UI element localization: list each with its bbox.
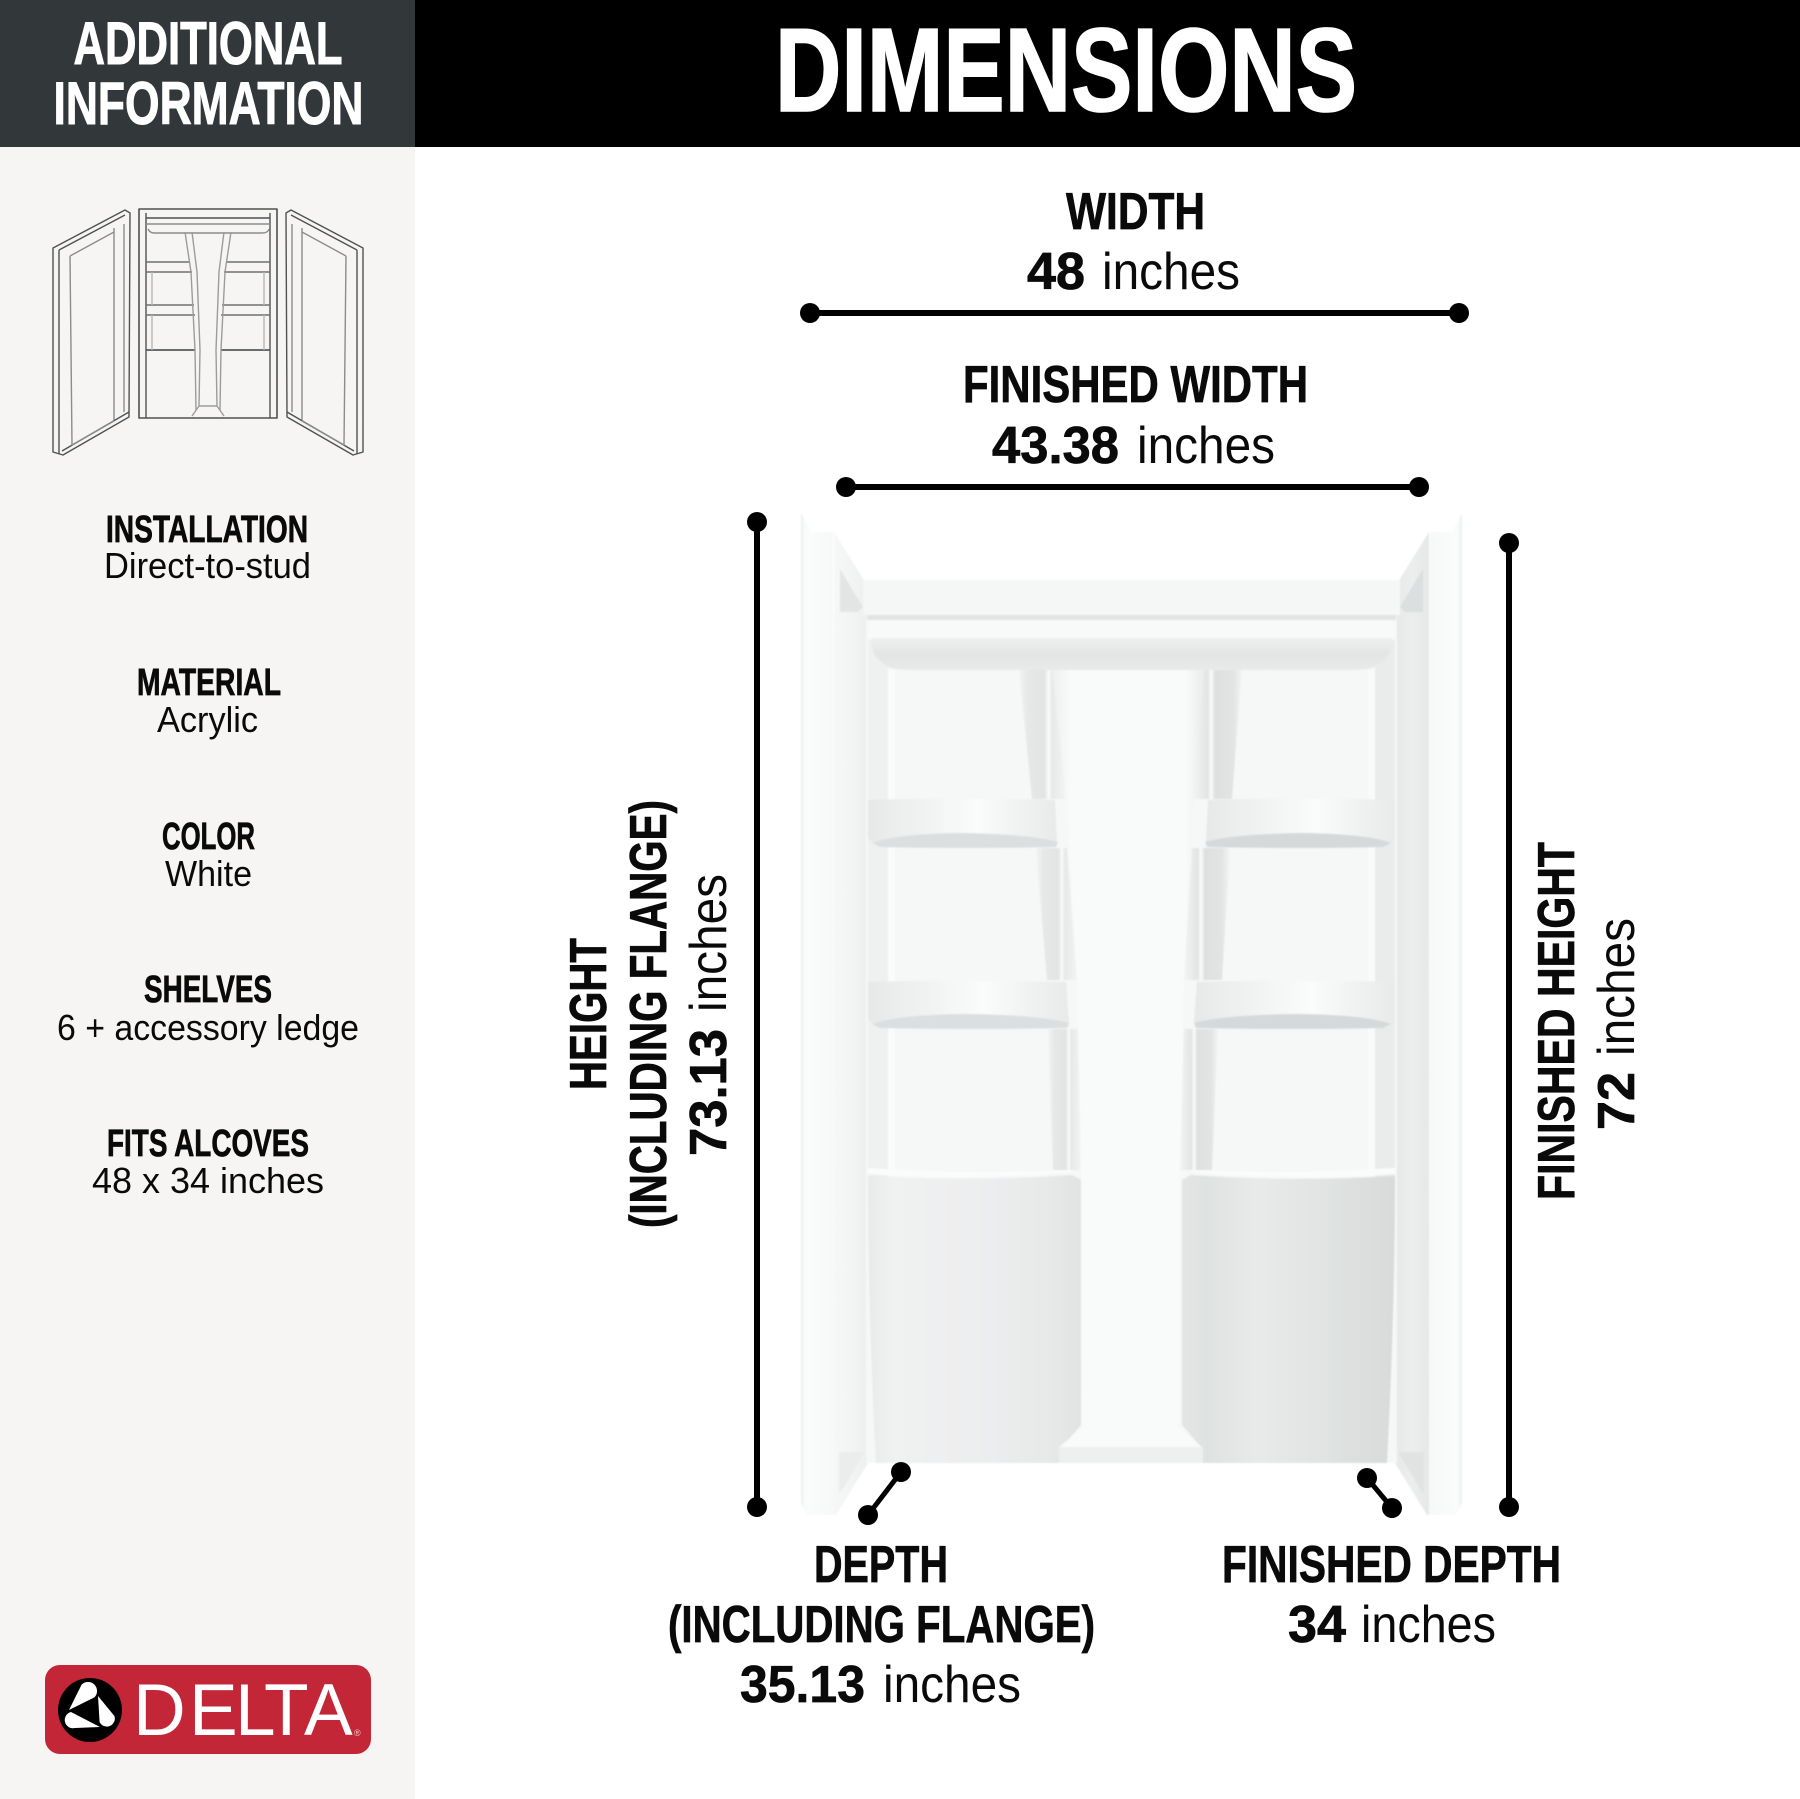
right shelf 1 lip <box>1205 833 1391 848</box>
spec: material <box>137 662 281 740</box>
header: additional information: ADDITIONAL <box>74 10 342 77</box>
left strut 2 <box>1036 848 1077 980</box>
right shelf 2 lip <box>1194 1014 1391 1029</box>
dimension: height label: 73.13 <box>680 1029 738 1156</box>
left side strip <box>868 640 888 1180</box>
right lower bulge <box>1182 1175 1395 1463</box>
logo: delta: ® <box>354 1728 361 1738</box>
dimension: width label: inches <box>1102 243 1240 301</box>
accessory ledge <box>871 638 1392 670</box>
dimension: finished width label: inches <box>1137 417 1275 475</box>
spec: color: White <box>165 853 252 894</box>
spec: color <box>162 816 255 894</box>
panel: additional information sidebar background <box>0 146 415 1799</box>
arrow: depth line <box>858 1462 911 1525</box>
band under shadow <box>868 620 1395 639</box>
spec: fits alcoves <box>92 1123 324 1201</box>
left strut 3 <box>1048 1029 1081 1170</box>
dimension: finished depth label: FINISHED DEPTH <box>1222 1536 1561 1594</box>
right flange <box>1429 513 1462 1515</box>
spec: material: Acrylic <box>157 699 258 740</box>
floor strip <box>1059 1447 1203 1463</box>
left flange <box>801 513 834 1515</box>
left side strip highlight <box>888 670 895 1170</box>
dimension: finished width label: FINISHED WIDTH <box>963 356 1308 414</box>
dimension: height label <box>560 800 738 1228</box>
dimension: finished depth label: 34 <box>1288 1596 1346 1654</box>
dimension: depth label <box>668 1536 1095 1714</box>
logo: delta: DELTA <box>133 1670 353 1751</box>
dimension: depth label: DEPTH <box>814 1536 948 1594</box>
spec: fits alcoves: 48 x 34 inches <box>92 1160 324 1201</box>
arrow: finished depth line <box>1357 1468 1402 1518</box>
arrow: finished height line <box>1499 533 1519 1517</box>
dimension: height label: HEIGHT <box>560 938 618 1090</box>
left shelf 2 <box>868 980 1069 1023</box>
floor trapezoid <box>1059 1425 1202 1447</box>
dimension: finished height label: FINISHED HEIGHT <box>1528 842 1586 1200</box>
left bulge rim <box>868 1168 1072 1178</box>
dimension: width label: 48 <box>1027 243 1085 301</box>
right side strip highlight <box>1368 670 1375 1170</box>
top band shadow line <box>867 615 1396 620</box>
icon part: center panel <box>139 209 277 418</box>
spec: color: COLOR <box>162 816 255 858</box>
arrow: width line <box>800 303 1469 323</box>
logo: delta <box>45 1665 371 1754</box>
spec: installation: Direct-to-stud <box>104 545 311 586</box>
header: dimensions title <box>415 0 1800 147</box>
right bulge rim <box>1191 1168 1395 1178</box>
dimension: width label: WIDTH <box>1066 183 1205 241</box>
dimension: depth label: (INCLUDING FLANGE) <box>668 1596 1095 1654</box>
arrow: height line <box>747 512 767 1517</box>
left upper strut <box>1019 668 1066 799</box>
center column <box>1052 668 1204 1425</box>
dimension: height label: (INCLUDING FLANGE) <box>620 800 678 1228</box>
right shelf 1 <box>1206 798 1395 842</box>
dimension: finished width label: 43.38 <box>992 417 1119 475</box>
icon: exploded three-panel wall line drawing <box>53 209 363 455</box>
header: dimensions title: DIMENSIONS <box>775 4 1357 137</box>
left shelf 1 <box>868 798 1057 842</box>
right shelf 2 <box>1194 980 1395 1023</box>
dimension: finished height label <box>1528 842 1646 1200</box>
left wall upper recess <box>840 569 863 612</box>
left lower bulge <box>868 1175 1081 1463</box>
back wall base <box>866 580 1397 1463</box>
spec: shelves: SHELVES <box>144 969 272 1011</box>
dimension: finished depth label: inches <box>1361 1596 1496 1654</box>
dimension: finished width label <box>963 356 1308 475</box>
dimension: width label <box>1027 183 1240 301</box>
left side wall <box>834 532 868 1515</box>
right upper strut <box>1193 668 1242 799</box>
right wall lower recess <box>1398 1452 1424 1492</box>
right strut 3 <box>1180 1029 1218 1170</box>
spec: shelves <box>57 969 359 1048</box>
icon part: left panel <box>53 210 130 455</box>
right wall upper recess <box>1400 569 1423 612</box>
header: additional information: INFORMATION <box>54 70 364 137</box>
header: additional information <box>0 0 415 147</box>
dimension: depth label: 35.13 <box>740 1656 865 1714</box>
spec: material: MATERIAL <box>137 662 281 704</box>
dimension: depth label: inches <box>883 1656 1021 1714</box>
dimension: finished depth label <box>1222 1536 1561 1654</box>
spec: fits alcoves: FITS ALCOVES <box>107 1123 309 1165</box>
arrow: finished width line <box>836 477 1429 497</box>
right side strip <box>1375 640 1395 1180</box>
dimension: height label: inches <box>680 874 738 1012</box>
spec: shelves: 6 + accessory ledge <box>57 1007 359 1048</box>
dimension: finished height label: inches <box>1588 918 1646 1056</box>
product image: shower wall set <box>801 513 1462 1515</box>
left shelf 1 lip <box>872 833 1058 848</box>
spec: installation: INSTALLATION <box>106 509 308 551</box>
dimension: finished height label: 72 <box>1588 1072 1646 1130</box>
left wall lower recess <box>839 1452 865 1492</box>
icon part: right panel <box>286 210 363 455</box>
left shelf 2 lip <box>872 1014 1069 1029</box>
right strut 2 <box>1184 848 1230 980</box>
right side wall <box>1395 532 1429 1515</box>
spec: installation <box>104 509 311 586</box>
top band <box>863 580 1400 615</box>
